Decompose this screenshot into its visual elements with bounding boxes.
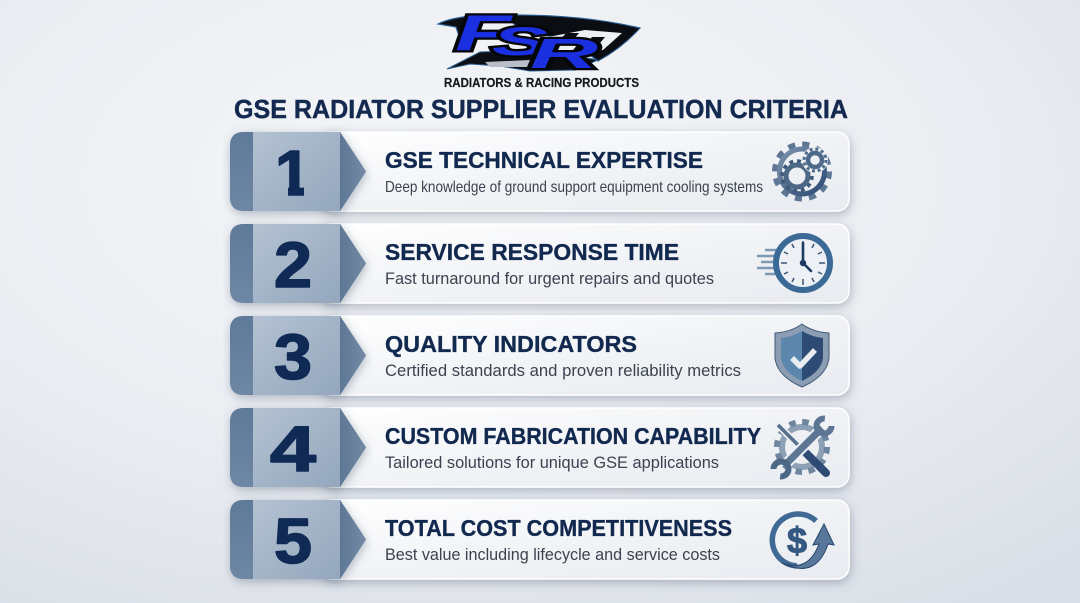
logo: FSR Radiators and Racing Products: S (492, 20, 549, 64)
icon: gear with crossed wrench and screwdriver (774, 418, 832, 476)
heading: GSE TECHNICAL EXPERTISE (385, 147, 703, 173)
logo: FSR Radiators and Racing Products: F (455, 5, 514, 61)
logo: FSR Radiators and Racing Products (438, 5, 640, 90)
title: GSE RADIATOR SUPPLIER EVALUATION CRITERIA (234, 96, 848, 124)
logo: FSR Radiators and Racing Products: R (530, 30, 599, 77)
heading: QUALITY INDICATORS (385, 331, 637, 357)
panel: criterion 3 quality indicators (230, 316, 849, 395)
panel: criterion 5 total cost competitiveness (230, 500, 849, 579)
logo: FSR Radiators and Racing Products: RADIATORS & RACING PRODUCTS (444, 76, 639, 90)
panel: criterion 4 custom fabrication capability (230, 408, 849, 487)
description: Fast turnaround for urgent repairs and quotes (385, 270, 714, 288)
number 2: 2 (274, 229, 312, 301)
description: Deep knowledge of ground support equipment cooling systems (385, 179, 763, 196)
panel: criterion 1 GSE technical expertise (230, 132, 849, 211)
description: Best value including lifecycle and service costs (385, 546, 720, 564)
heading: CUSTOM FABRICATION CAPABILITY (385, 423, 761, 449)
icon: clock (757, 236, 830, 290)
number 4: 4 (270, 413, 317, 485)
heading: TOTAL COST COMPETITIVENESS (385, 515, 732, 541)
icon: dollar with up arrow (772, 514, 834, 568)
icon: gears (776, 145, 828, 198)
number 3: 3 (274, 321, 312, 393)
icon: dollar with up arrow: $ (787, 520, 807, 561)
icon: shield with check (775, 324, 829, 387)
description: Certified standards and proven reliability metrics (385, 362, 741, 380)
description: Tailored solutions for unique GSE applications (385, 454, 719, 472)
number 1: 1 (275, 137, 311, 209)
heading: SERVICE RESPONSE TIME (385, 239, 679, 265)
number 5: 5 (274, 505, 312, 577)
panel: criterion 2 service response time (230, 224, 849, 303)
